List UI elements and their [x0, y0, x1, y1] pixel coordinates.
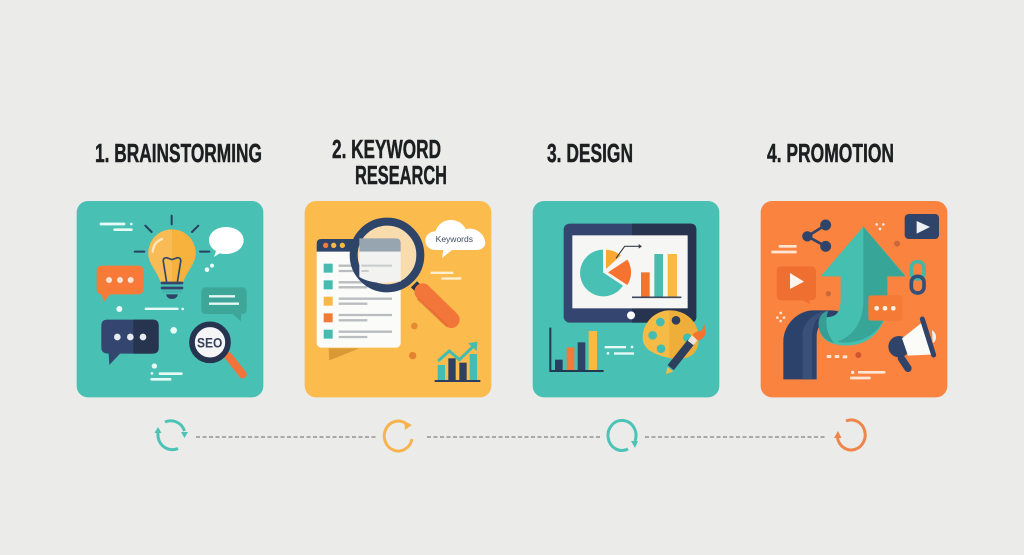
- heading: 2. Keyword Research: RESEARCH: [355, 160, 447, 190]
- icon: share: [802, 220, 831, 252]
- icon: cycle teal 2: [608, 420, 638, 450]
- icon: monitor with charts: [564, 224, 696, 323]
- icon: big upward arrow: [783, 227, 906, 379]
- decorative lines: [605, 346, 634, 355]
- icon: navy chat bubble: [101, 320, 159, 365]
- heading: 4. Promotion: 4. PROMOTION: [767, 138, 894, 168]
- icon: chain link: [911, 262, 924, 293]
- panel: promotion: [761, 201, 947, 397]
- icon: keywords cloud: [425, 220, 485, 258]
- panel: keyword research: [305, 201, 491, 397]
- icon: white speech bubble: [209, 227, 244, 257]
- icon: cycle yellow: [384, 421, 412, 451]
- icon: megaphone: [888, 319, 936, 368]
- icon: SEO magnifier: SEO: [197, 335, 222, 351]
- icon: small bar chart: [550, 328, 604, 371]
- document list: [317, 239, 401, 360]
- icon: cycle orange: [834, 420, 865, 450]
- heading: 2. Keyword Research: [332, 134, 447, 190]
- icon: magnifying glass: [354, 222, 451, 326]
- icon: orange play bubble: [777, 266, 816, 304]
- icon: green note bubble: [201, 287, 247, 321]
- panel: design: [533, 201, 719, 397]
- icon: light bulb: [135, 216, 209, 299]
- pie chart: [580, 244, 642, 296]
- icon: orange chat bubble: [97, 266, 143, 302]
- heading: 1. Brainstorming: 1. BRAINSTORMING: [95, 138, 262, 168]
- icon: video badge: [905, 214, 939, 239]
- decorative text lines: [100, 223, 184, 381]
- icon: chat bubble: [868, 295, 902, 321]
- panel: brainstorming: [77, 201, 263, 397]
- icon: cycle teal 1: [154, 421, 188, 450]
- heading: 2. Keyword Research: 2. KEYWORD: [332, 134, 441, 164]
- decorative dots and lines: [771, 223, 900, 379]
- decorative lines and dots: [409, 272, 461, 359]
- bar chart: [632, 254, 681, 297]
- icon: palette and brush: [643, 310, 705, 374]
- icon: growth chart: [435, 342, 480, 381]
- icon: keywords cloud: Keywords: [436, 234, 473, 244]
- timeline: dashed connectors: [196, 436, 826, 438]
- icon: SEO magnifier: [192, 324, 243, 374]
- heading: 3. Design: 3. DESIGN: [547, 138, 633, 168]
